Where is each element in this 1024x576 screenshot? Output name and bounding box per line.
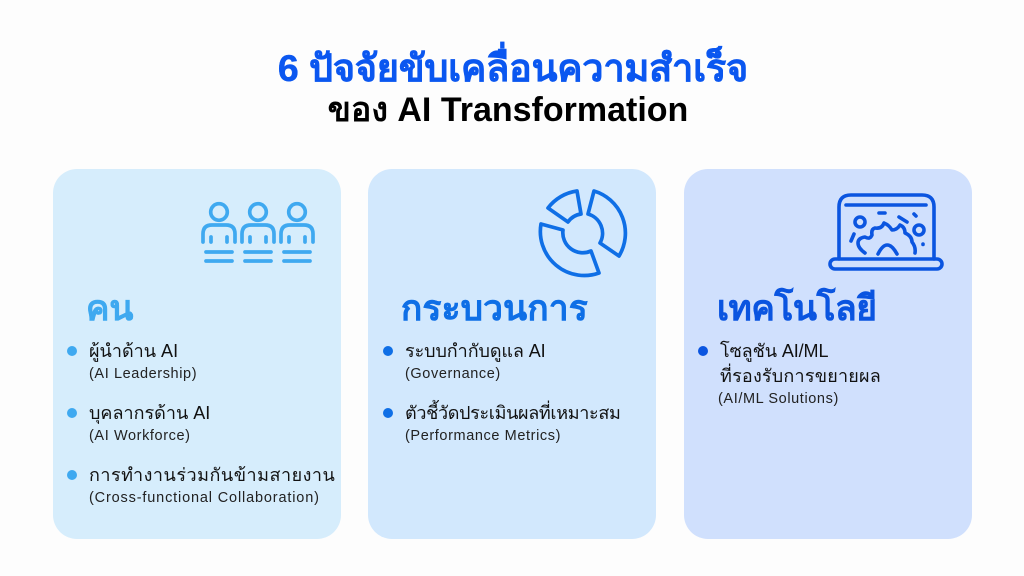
title — [278, 42, 748, 129]
bullet: performance metrics: (Performance Metrics) — [405, 428, 561, 444]
heading: technology: เทคโนโลยี — [717, 289, 877, 328]
title line 1: 6 ปัจจัยขับเคลื่อนความสำเร็จ — [278, 47, 748, 89]
panel: people — [53, 169, 341, 539]
bullet: performance metrics — [383, 400, 620, 444]
bullet: cross-functional collaboration: (Cross-functional Collaboration) — [89, 490, 320, 506]
title line 2: ของ AI Transformation — [328, 91, 688, 129]
bullet: cross-functional collaboration — [67, 465, 335, 506]
bullet: performance metrics: ตัวชี้วัดประเมินผลที่เหมาะสม — [405, 403, 620, 423]
icon: laptop with gear — [828, 193, 944, 271]
bullet: AI leadership: ผู้นำด้าน AI — [89, 341, 178, 361]
bullet: AI workforce: บุคลากรด้าน AI — [89, 403, 210, 423]
icon: segmented donut chart — [538, 189, 628, 278]
bullet: AI workforce — [67, 403, 210, 444]
heading: people: คน — [86, 289, 133, 328]
bullet: governance: ระบบกำกับดูแล AI — [405, 341, 546, 361]
bullet: cross-functional collaboration: การทำงานร่วมกันข้ามสายงาน — [89, 465, 335, 485]
panel: process — [368, 169, 656, 539]
bullet: AI/ML solutions — [698, 340, 881, 407]
bullet: AI workforce: (AI Workforce) — [89, 428, 191, 444]
bullet: AI/ML solutions: ที่รองรับการขยายผล — [720, 366, 881, 386]
icon: three people — [201, 202, 315, 263]
bullet: governance — [383, 341, 546, 382]
bullet: AI leadership — [67, 341, 197, 382]
bullet: AI leadership: (AI Leadership) — [89, 366, 197, 382]
bullet: AI/ML solutions: โซลูชัน AI/ML — [720, 341, 828, 361]
bullet: governance: (Governance) — [405, 366, 501, 382]
bullet: AI/ML solutions: (AI/ML Solutions) — [718, 391, 839, 407]
panel: technology — [684, 169, 972, 539]
heading: process: กระบวนการ — [401, 289, 588, 328]
